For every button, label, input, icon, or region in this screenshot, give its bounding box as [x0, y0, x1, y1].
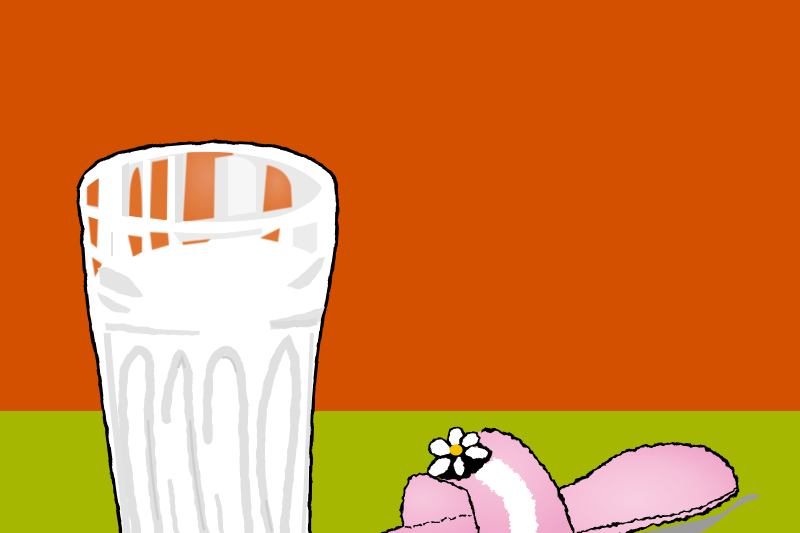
flower	[425, 428, 493, 481]
slipper shadow	[640, 494, 758, 533]
slipper	[376, 428, 758, 533]
stitched crease	[405, 515, 470, 528]
thin gray rib lines	[111, 154, 183, 256]
glass inner rear wall	[87, 152, 322, 226]
orange glimpses through the glass	[87, 151, 292, 277]
highlight on rear wall	[228, 157, 256, 216]
darker flute accents	[148, 357, 272, 532]
background: orange wall	[0, 0, 800, 411]
gray panel below the rim on the right	[293, 222, 317, 262]
strap outline	[482, 430, 576, 533]
background: green table	[0, 411, 800, 533]
sole edge line	[577, 488, 737, 533]
strap fur stripe	[473, 458, 538, 533]
slipper sole	[550, 444, 738, 533]
strap fill	[440, 430, 574, 533]
glass side shading	[107, 333, 312, 533]
glass flutes	[123, 341, 296, 533]
white rim bands and ribs	[84, 146, 332, 233]
flower petals	[425, 428, 489, 481]
glass body	[78, 142, 337, 533]
milk surface	[127, 240, 316, 324]
slipper left fold	[376, 474, 481, 533]
flower shadow	[432, 436, 493, 480]
milk edge shadows	[97, 258, 326, 335]
flower centre	[450, 444, 462, 456]
gray strip under rim band	[173, 226, 262, 242]
glass of milk	[78, 142, 337, 533]
slipper strap	[440, 430, 576, 533]
